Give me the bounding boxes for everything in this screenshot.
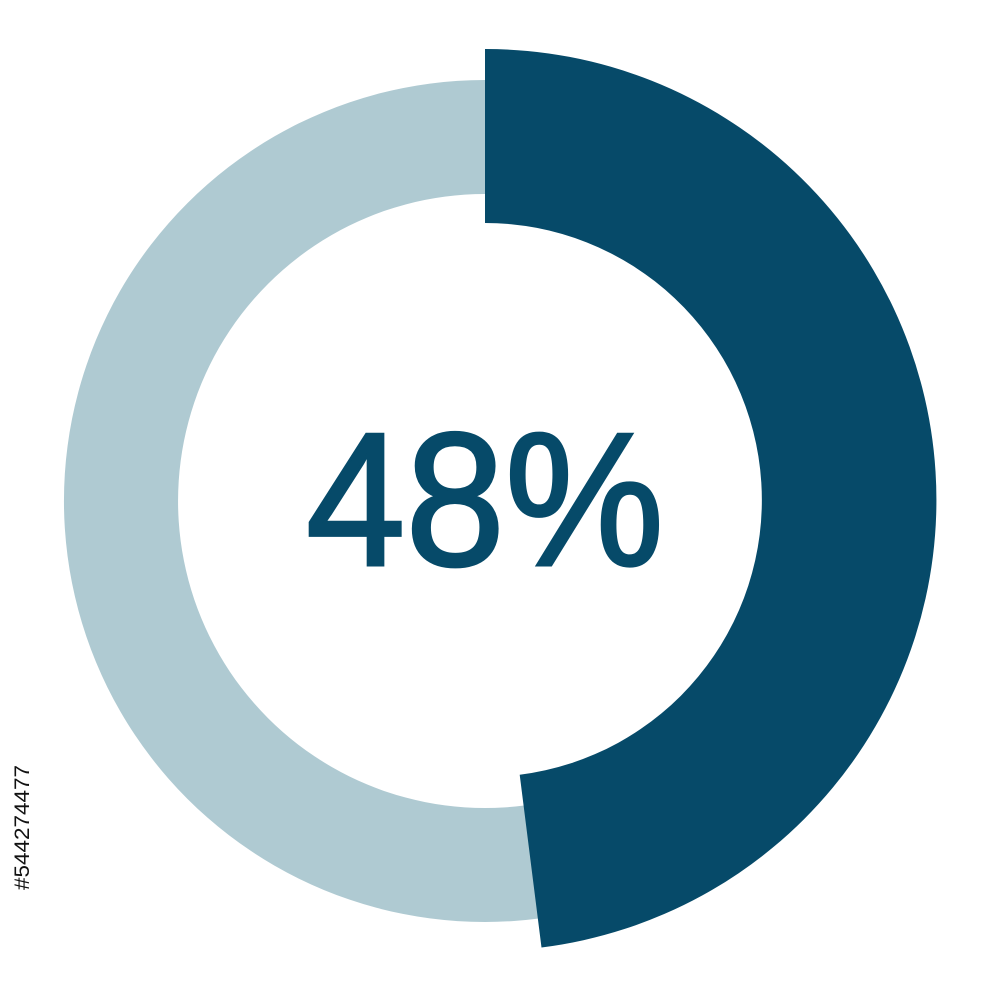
background ring (remaining 52%) bbox=[64, 80, 906, 922]
percentage label: 48% bbox=[306, 394, 664, 606]
highlighted segment (48%) bbox=[485, 49, 936, 947]
side id text: #544274477 bbox=[11, 765, 34, 890]
